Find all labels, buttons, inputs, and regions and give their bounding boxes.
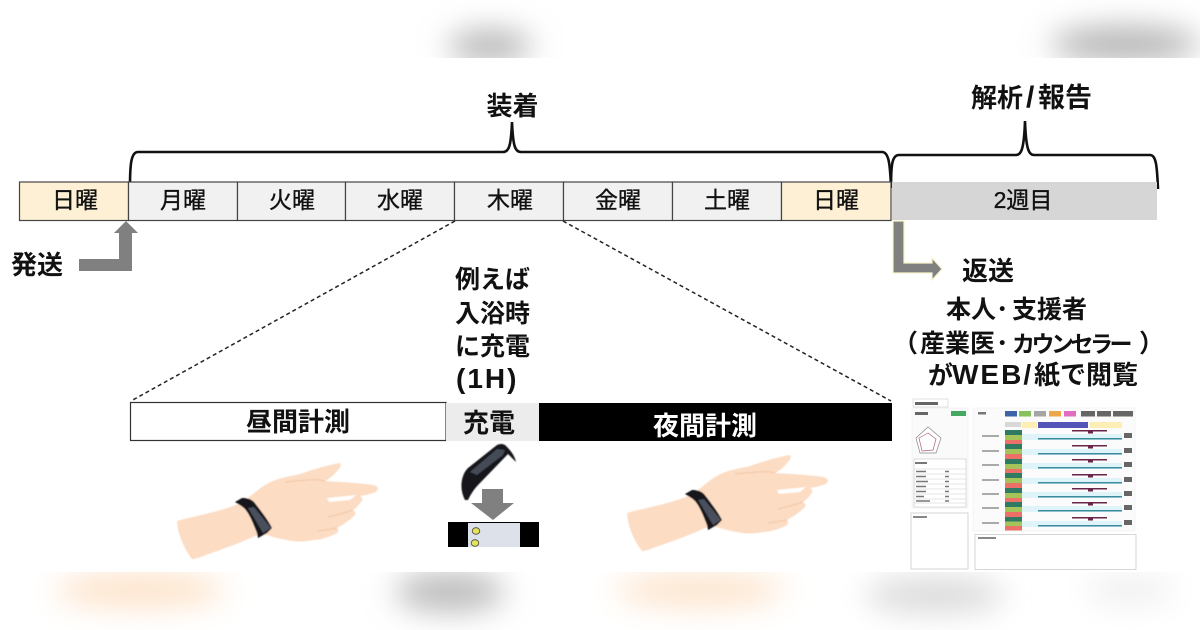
note: viewers of report: 本人	[946, 296, 996, 324]
heading: analysis and report: 解析	[971, 83, 1023, 113]
day: Tuesday	[238, 182, 346, 220]
day: Sunday 2	[782, 182, 891, 220]
day: Saturday	[672, 182, 782, 220]
week 2 block: 2週目	[994, 187, 1052, 213]
icon: band over charger	[448, 444, 539, 547]
note: viewers of report: カウンセラー	[1012, 331, 1130, 357]
icon: charger	[448, 522, 539, 547]
bracket: analysis and report	[891, 121, 1158, 189]
arrow: shipping	[79, 221, 138, 271]
day: Wednesday	[346, 182, 454, 220]
day: Sunday 2: 日曜	[813, 187, 859, 213]
chart row 3	[982, 459, 1132, 474]
charging bar	[446, 403, 539, 441]
report screenshot	[911, 399, 1136, 570]
icon: band	[461, 444, 516, 500]
panel: graph	[973, 408, 1135, 531]
label: shipping: 発送	[11, 250, 63, 280]
chart row 4	[982, 473, 1132, 488]
chart row 1	[982, 430, 1132, 445]
day: Monday: 月曜	[160, 187, 206, 213]
panel: judgement	[911, 513, 968, 569]
day: Monday	[128, 182, 238, 220]
daytime measurement bar	[130, 402, 446, 440]
bracket: wearing period	[130, 122, 891, 186]
heading: analysis and report: 報告	[1038, 83, 1092, 113]
day: Thursday: 木曜	[487, 187, 533, 213]
day: Sunday: 日曜	[52, 187, 98, 213]
dashed line: zoom left	[131, 221, 455, 401]
daytime measurement bar: 昼間計測	[246, 407, 350, 437]
note: charging example: (1H)	[456, 363, 518, 394]
note: viewers of report: ）	[1139, 330, 1164, 358]
note: viewers of report: ･	[996, 296, 1009, 324]
icon: hand with band, night	[627, 455, 828, 551]
dashed line: zoom right	[563, 221, 891, 401]
day: Sunday	[20, 182, 128, 220]
blurred bottom background band	[55, 572, 1175, 613]
week 2 block	[892, 182, 1157, 220]
weekly schedule bar	[20, 182, 1157, 220]
day: Wednesday: 水曜	[377, 187, 423, 213]
day: Saturday: 土曜	[704, 187, 750, 213]
dropdown	[913, 399, 948, 407]
day: Thursday	[454, 182, 564, 220]
chart row 2	[982, 444, 1132, 459]
chart row 5	[982, 488, 1132, 503]
note: charging example: 入浴時	[455, 300, 530, 328]
blurred top background band	[448, 26, 1200, 62]
note: charging example: 例えば	[455, 266, 530, 294]
note: viewers of report: ･	[996, 330, 1009, 358]
day: Tuesday: 火曜	[269, 187, 315, 213]
night measurement bar	[539, 403, 892, 441]
arrow: return	[893, 221, 942, 280]
note: viewers of report: （	[893, 330, 918, 358]
heading: wearing period: 装着	[486, 91, 539, 121]
night measurement bar: 夜間計測	[653, 411, 757, 441]
charging bar: 充電	[463, 408, 515, 438]
chart row 7	[982, 517, 1132, 530]
chart row 6	[982, 502, 1132, 517]
day: Friday	[564, 182, 672, 220]
note: viewers of report: 紙で閲覧	[1034, 360, 1138, 390]
icon: hand with band, daytime	[177, 463, 378, 559]
day: Friday: 金曜	[595, 187, 641, 213]
arrow: down to charger	[471, 489, 514, 520]
label: return: 返送	[962, 256, 1014, 286]
note: charging example: に充電	[455, 333, 530, 361]
note: viewers of report: WEB/	[952, 359, 1033, 390]
panel: comments	[975, 534, 1136, 570]
note: viewers of report: 産業医	[920, 330, 995, 358]
heading: analysis and report: /	[1026, 81, 1035, 114]
note: viewers of report: が	[928, 361, 953, 390]
note: viewers of report: 支援者	[1012, 296, 1087, 324]
panel: evaluation	[912, 408, 968, 508]
